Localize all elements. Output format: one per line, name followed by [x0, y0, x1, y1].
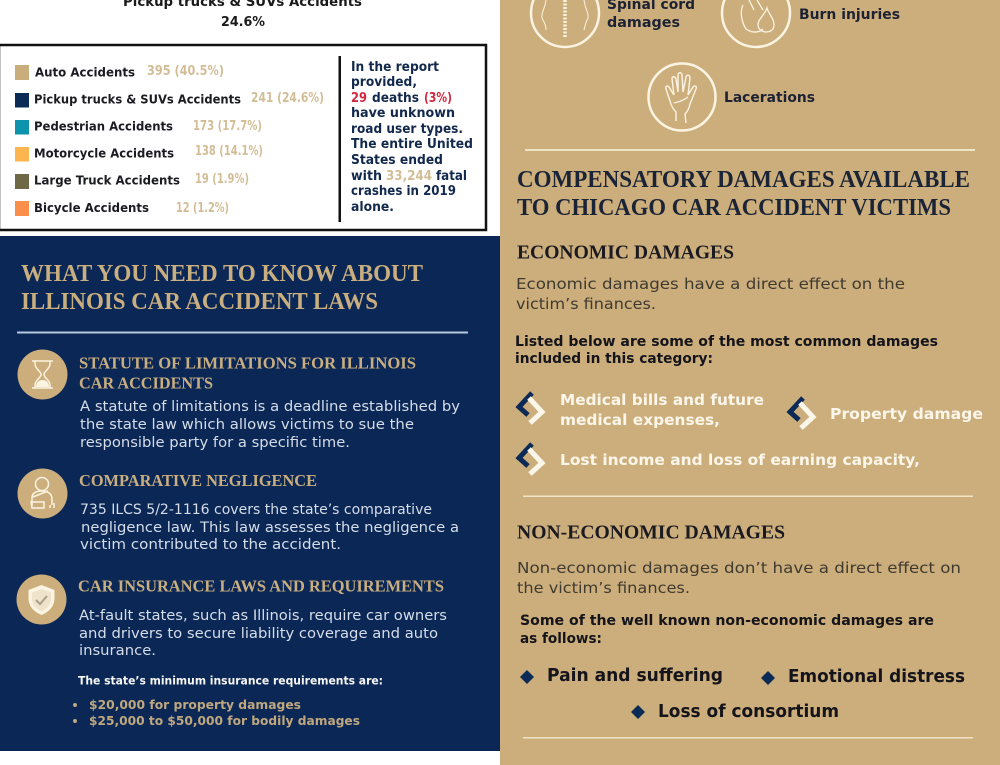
callout: unknown road user types: have unknown [351, 106, 455, 121]
block: comparative negligence: victim contributed to the accident. [80, 537, 341, 553]
legend row: auto accidents [15, 63, 224, 80]
list item: pain and suffering: Pain and suffering [547, 666, 723, 686]
text: non-economic list intro: Some of the well known non-economic damages are [520, 613, 934, 629]
text: economic damages description [516, 275, 905, 313]
legend row: motorcycle [15, 143, 263, 162]
list: minimum insurance requirements: $20,000 for property damages [89, 697, 301, 712]
icon: chevrons medical bills [519, 393, 542, 423]
callout: unknown road user types: with [351, 169, 382, 184]
list item: emotional distress: Emotional distress [788, 667, 965, 687]
callout: unknown road user types: In the report [351, 60, 439, 75]
block: statute of limitations: STATUTE OF LIMITATIONS FOR ILLINOIS [79, 354, 416, 372]
block: statute of limitations [79, 354, 460, 451]
legend row: bicycle: 12 (1.2%) [176, 200, 229, 216]
block: car insurance laws: and drivers to secure liability coverage and auto [79, 626, 438, 642]
callout: unknown road user types: deaths [372, 91, 419, 106]
callout: unknown road user types: 33,244 [386, 169, 432, 184]
list item: property damage: Property damage [830, 405, 983, 423]
label: lacerations: Lacerations [724, 90, 815, 106]
chart caption: top vehicle type: 24.6% [221, 15, 265, 30]
block: statute of limitations: A statute of limitations is a deadline established by [80, 399, 460, 415]
legend row: bicycle: Bicycle Accidents [34, 200, 149, 215]
icon: spinal cord [531, 0, 599, 47]
legend row: motorcycle: 138 (14.1%) [195, 143, 263, 159]
legend row: pedestrian: 173 (17.7%) [193, 118, 262, 134]
panel: injuries and compensatory damages [500, 0, 1000, 765]
text: non-economic list intro [520, 613, 934, 647]
legend row: pickup trucks and SUVs [15, 90, 324, 108]
list item: lost income: Lost income and loss of earning capacity, [560, 451, 920, 469]
legend row: pickup trucks and SUVs: Pickup trucks & SUVs Accidents [34, 92, 241, 106]
text: economic damages list intro: included in this category: [515, 351, 713, 367]
legend row: motorcycle: Motorcycle Accidents [34, 146, 174, 160]
icon: burned hand [722, 0, 790, 47]
label: burn injuries: Burn injuries [799, 7, 900, 23]
panel: accident type legend [0, 45, 486, 230]
legend row: pedestrian [15, 118, 262, 134]
callout: unknown road user types: alone. [351, 200, 394, 215]
panel: Illinois car accident laws [0, 236, 500, 751]
heading: compensatory damages [517, 167, 970, 221]
legend row: auto accidents: 395 (40.5%) [147, 63, 224, 79]
text: non-economic description: Non-economic damages don’t have a direct effect on [517, 559, 961, 577]
label: spinal cord damages [607, 0, 695, 31]
heading: Illinois laws: WHAT YOU NEED TO KNOW ABOUT [21, 261, 423, 287]
list item: medical bills: medical expenses, [560, 411, 720, 429]
block: car insurance laws: insurance. [79, 643, 156, 659]
block: car insurance laws: At-fault states, such as Illinois, require car owners [79, 608, 447, 624]
callout: unknown road user types: crashes in 2019 [351, 184, 456, 199]
block: statute of limitations: CAR ACCIDENTS [79, 374, 213, 392]
subheading: non-economic damages: NON-ECONOMIC DAMAGES [517, 522, 785, 544]
list item: medical bills: Medical bills and future [560, 391, 764, 409]
list: minimum insurance requirements: $25,000 to $50,000 for bodily damages [89, 713, 360, 728]
block: car insurance laws [73, 576, 447, 728]
legend row: auto accidents: Auto Accidents [35, 64, 135, 80]
callout: unknown road user types: fatal [436, 169, 467, 184]
legend row: large truck [15, 171, 249, 189]
heading: Illinois laws: ILLINOIS CAR ACCIDENT LAWS [21, 289, 378, 315]
callout: unknown road user types: road user types. [351, 122, 463, 137]
list: minimum insurance requirements [73, 697, 360, 728]
list item: medical bills [560, 391, 764, 429]
block: statute of limitations: the state law which allows victims to sue the [80, 417, 414, 433]
text: non-economic description: the victim’s finances. [517, 579, 690, 597]
legend row: large truck: 19 (1.9%) [195, 171, 249, 187]
block: comparative negligence [79, 471, 459, 553]
block: comparative negligence: COMPARATIVE NEGLIGENCE [79, 471, 317, 490]
callout: unknown road user types: provided, [351, 75, 417, 90]
text: economic damages list intro: Listed below are some of the most common damages [515, 334, 938, 350]
icon: shield with check [16, 574, 66, 624]
block: car insurance laws: The state’s minimum insurance requirements are: [78, 674, 383, 688]
heading: compensatory damages: TO CHICAGO CAR ACCIDENT VICTIMS [517, 195, 951, 221]
legend row: pedestrian: Pedestrian Accidents [34, 118, 173, 134]
callout: unknown road user types: States ended [351, 153, 443, 168]
block: statute of limitations: responsible party for a specific time. [80, 435, 350, 451]
list item: loss of consortium: Loss of consortium [658, 702, 839, 722]
icon: lacerated hand [648, 64, 716, 130]
icon: person with seat belt [18, 468, 68, 518]
chart caption: top vehicle type [123, 0, 362, 30]
block: car insurance laws: CAR INSURANCE LAWS AND REQUIREMENTS [78, 576, 444, 596]
text: economic damages list intro [515, 334, 938, 367]
callout: unknown road user types [351, 60, 473, 215]
legend row: bicycle [15, 200, 229, 216]
text: economic damages description: Economic damages have a direct effect on the [516, 275, 905, 293]
label: spinal cord damages: damages [607, 15, 680, 31]
text: non-economic description [517, 559, 961, 597]
callout: unknown road user types: (3%) [424, 91, 452, 106]
callout: unknown road user types: The entire United [351, 137, 473, 152]
text: non-economic list intro: as follows: [520, 631, 602, 647]
legend row: pickup trucks and SUVs: 241 (24.6%) [251, 90, 324, 106]
block: comparative negligence: negligence law. This law assesses the negligence a [81, 520, 459, 536]
heading: Illinois laws [21, 261, 423, 315]
heading: compensatory damages: COMPENSATORY DAMAGES AVAILABLE [517, 167, 970, 193]
callout: unknown road user types: 29 [351, 91, 367, 106]
icon: chevrons property damage [790, 398, 813, 428]
block: comparative negligence: 735 ILCS 5/2-1116 covers the state’s comparative [80, 502, 432, 518]
legend row: large truck: Large Truck Accidents [34, 172, 180, 188]
icon: chevrons lost income [519, 444, 542, 474]
icon: hourglass [18, 350, 68, 400]
text: economic damages description: victim’s finances. [516, 295, 656, 313]
subheading: economic damages: ECONOMIC DAMAGES [517, 242, 734, 264]
